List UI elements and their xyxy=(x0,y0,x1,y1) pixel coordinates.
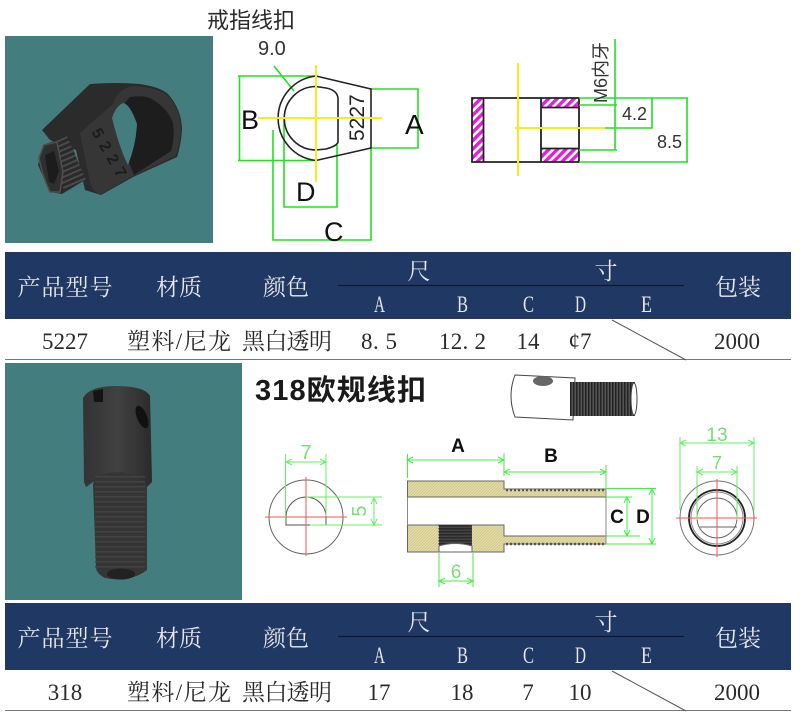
table header: 尺 xyxy=(408,259,430,284)
panel: 318 photo xyxy=(5,363,242,600)
drawing: ring clip section xyxy=(472,39,688,176)
table data row: 7 xyxy=(522,680,534,705)
icon: hex socket xyxy=(107,568,135,580)
table header: 产品型号 xyxy=(18,626,112,651)
label: D: D xyxy=(636,507,650,528)
title: ring clip: 戒指线扣 xyxy=(207,8,295,33)
title: 318: 318欧规线扣 xyxy=(255,374,426,407)
table header: 包装 xyxy=(715,275,761,300)
label: 6: 6 xyxy=(451,562,461,583)
label: 13: 13 xyxy=(706,425,728,446)
drawing: 318 right end view xyxy=(676,425,757,557)
table header: E xyxy=(641,292,652,317)
table header xyxy=(5,252,791,319)
table data row: 18 xyxy=(450,680,474,705)
table header: 颜色 xyxy=(263,626,309,651)
table header: 包装 xyxy=(715,626,761,651)
label: B: B xyxy=(544,446,558,467)
table header: 寸 xyxy=(594,610,618,635)
table header: 材质 xyxy=(156,275,202,300)
table data row xyxy=(5,671,791,711)
label: D: D xyxy=(296,177,316,207)
table header: A xyxy=(374,292,385,317)
table data row: 塑料/尼龙 xyxy=(127,329,231,354)
icon: ring body xyxy=(42,83,182,195)
table header: C xyxy=(523,292,534,317)
table data row: 2000 xyxy=(714,680,760,705)
label: 8.5: 8.5 xyxy=(657,132,682,152)
label: M6 internal thread: M6内牙 xyxy=(591,42,611,103)
label: 9.0: 9.0 xyxy=(258,38,286,60)
label: C: C xyxy=(324,217,344,247)
label: A: A xyxy=(405,109,424,140)
table header: B xyxy=(457,643,468,668)
icon: slot xyxy=(93,389,103,402)
drawing: 318 cross section xyxy=(407,436,656,587)
table data row: 14 xyxy=(516,329,540,354)
label: 5227: 5227 xyxy=(346,94,369,141)
label: 7: 7 xyxy=(712,453,722,473)
drawing: ring clip front xyxy=(238,38,424,247)
table header: 材质 xyxy=(156,626,202,651)
icon: ring face xyxy=(80,86,181,194)
table data row: 5227 xyxy=(42,329,88,354)
table data row: ¢7 xyxy=(568,329,592,354)
table data row: 2000 xyxy=(714,329,760,354)
table data row: 10 xyxy=(568,680,592,705)
table header: 尺 xyxy=(408,610,430,635)
icon: threaded stub xyxy=(38,136,85,194)
table header: E xyxy=(641,643,652,668)
product marking: 5227 xyxy=(88,126,129,181)
table: model 318 xyxy=(5,603,791,711)
table data row: 17 xyxy=(368,680,390,705)
table header: D xyxy=(575,292,586,317)
drawing: 3D view xyxy=(511,375,637,420)
table header: D xyxy=(575,643,586,668)
label: B: B xyxy=(241,105,259,135)
label: C: C xyxy=(610,507,624,528)
table header: 寸 xyxy=(594,259,618,284)
table header xyxy=(5,603,791,670)
icon: side hole xyxy=(133,404,151,430)
table header: C xyxy=(523,643,534,668)
label: 7: 7 xyxy=(300,442,312,464)
icon: head xyxy=(83,386,152,488)
table data row: 318 xyxy=(48,680,82,705)
table data row xyxy=(5,320,791,360)
table header: B xyxy=(457,292,468,317)
panel: ring clip photo xyxy=(5,36,213,243)
table header: 产品型号 xyxy=(18,275,112,300)
label: 4.2: 4.2 xyxy=(622,104,647,124)
label: 5: 5 xyxy=(349,505,371,517)
label: A: A xyxy=(451,436,465,457)
table data row: 12. 2 xyxy=(439,329,486,354)
drawing: 318 left end view xyxy=(265,442,382,556)
table data row: 塑料/尼龙 xyxy=(127,680,231,705)
table header: A xyxy=(374,643,385,668)
table header: 颜色 xyxy=(263,275,309,300)
icon: through hole xyxy=(112,103,137,165)
icon: ring opening xyxy=(124,96,174,175)
table data row: 黑白透明 xyxy=(242,329,332,354)
table data row: 8. 5 xyxy=(361,329,397,354)
table: model 5227 xyxy=(5,252,791,360)
icon: thread shaft xyxy=(93,472,147,579)
table data row: 黑白透明 xyxy=(242,680,332,705)
